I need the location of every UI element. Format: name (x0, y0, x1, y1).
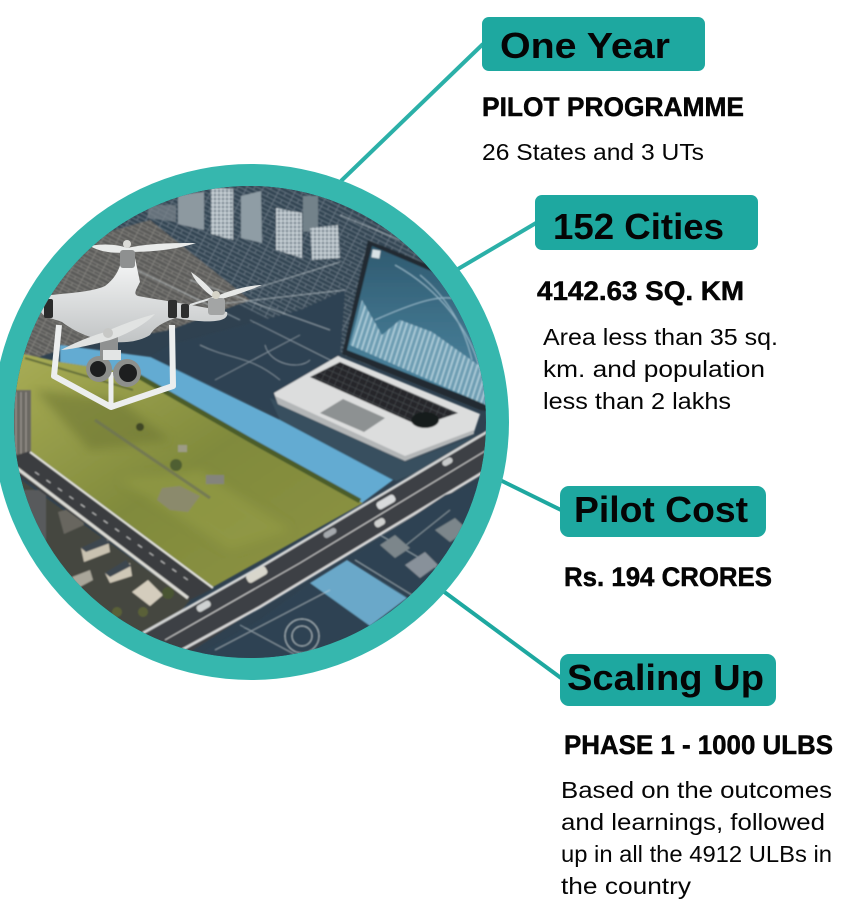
connector: 152 cities (458, 223, 536, 269)
subheading: pilot programme: PILOT PROGRAMME (482, 92, 744, 122)
heading: scaling up: Scaling Up (567, 657, 764, 698)
dark blueprint panel (150, 292, 346, 400)
subheading: area: 4142.63 SQ. KM (537, 276, 744, 306)
left road (14, 451, 214, 600)
circular photo: drone over city (0, 164, 510, 680)
connector: one year (341, 44, 483, 181)
left tower (12, 390, 31, 455)
block: scaling up (560, 654, 833, 899)
blueprint ground upper (112, 186, 424, 366)
right propeller (191, 272, 262, 300)
farm buildings (136, 423, 224, 512)
badge: 152 cities (535, 195, 758, 250)
aerial scene (14, 186, 486, 658)
lower water (310, 560, 407, 626)
subheading: cost: Rs. 194 CRORES (564, 562, 772, 592)
highway (158, 430, 486, 651)
block: pilot cost (560, 486, 772, 592)
teal ring (0, 164, 509, 680)
heading: one year: One Year (500, 25, 670, 66)
subheading: phase 1: PHASE 1 - 1000 ULBS (564, 730, 833, 760)
drone (40, 240, 262, 407)
text: scale-up details: and learnings, followed (561, 809, 825, 835)
badge: pilot cost (560, 486, 766, 537)
houses (58, 505, 174, 617)
block: 152 cities (535, 195, 778, 414)
badge: one year (482, 17, 705, 71)
text: scale-up details: up in all the 4912 ULBs in (561, 841, 832, 867)
camera gimbal (100, 337, 118, 357)
text: states: 26 States and 3 UTs (482, 139, 704, 165)
text: scale-up details: the country (561, 873, 691, 899)
landing gear (54, 325, 173, 407)
cars (195, 456, 454, 613)
text: criteria: km. and population (543, 356, 765, 382)
text: criteria: less than 2 lakhs (543, 388, 731, 414)
text: scale-up details (561, 777, 832, 899)
badge: scaling up (560, 654, 776, 706)
heading: 152 cities: 152 Cities (553, 206, 724, 247)
connector: pilot cost (500, 480, 561, 510)
laptop (274, 240, 495, 461)
front propeller (61, 314, 155, 350)
lower city block (21, 480, 190, 632)
grass field (10, 352, 363, 587)
arms and body (40, 258, 227, 342)
text: scale-up details: Based on the outcomes (561, 777, 832, 803)
text: criteria: Area less than 35 sq. (543, 324, 778, 350)
heading: pilot cost: Pilot Cost (574, 489, 748, 530)
city towers (148, 188, 340, 260)
connector: scaling up (443, 591, 561, 678)
lower blueprint (202, 484, 478, 658)
block: one year (482, 17, 744, 165)
text: criteria (543, 324, 778, 414)
dark band under laptop (270, 398, 490, 481)
top propeller (90, 243, 196, 253)
water channel (60, 345, 393, 503)
